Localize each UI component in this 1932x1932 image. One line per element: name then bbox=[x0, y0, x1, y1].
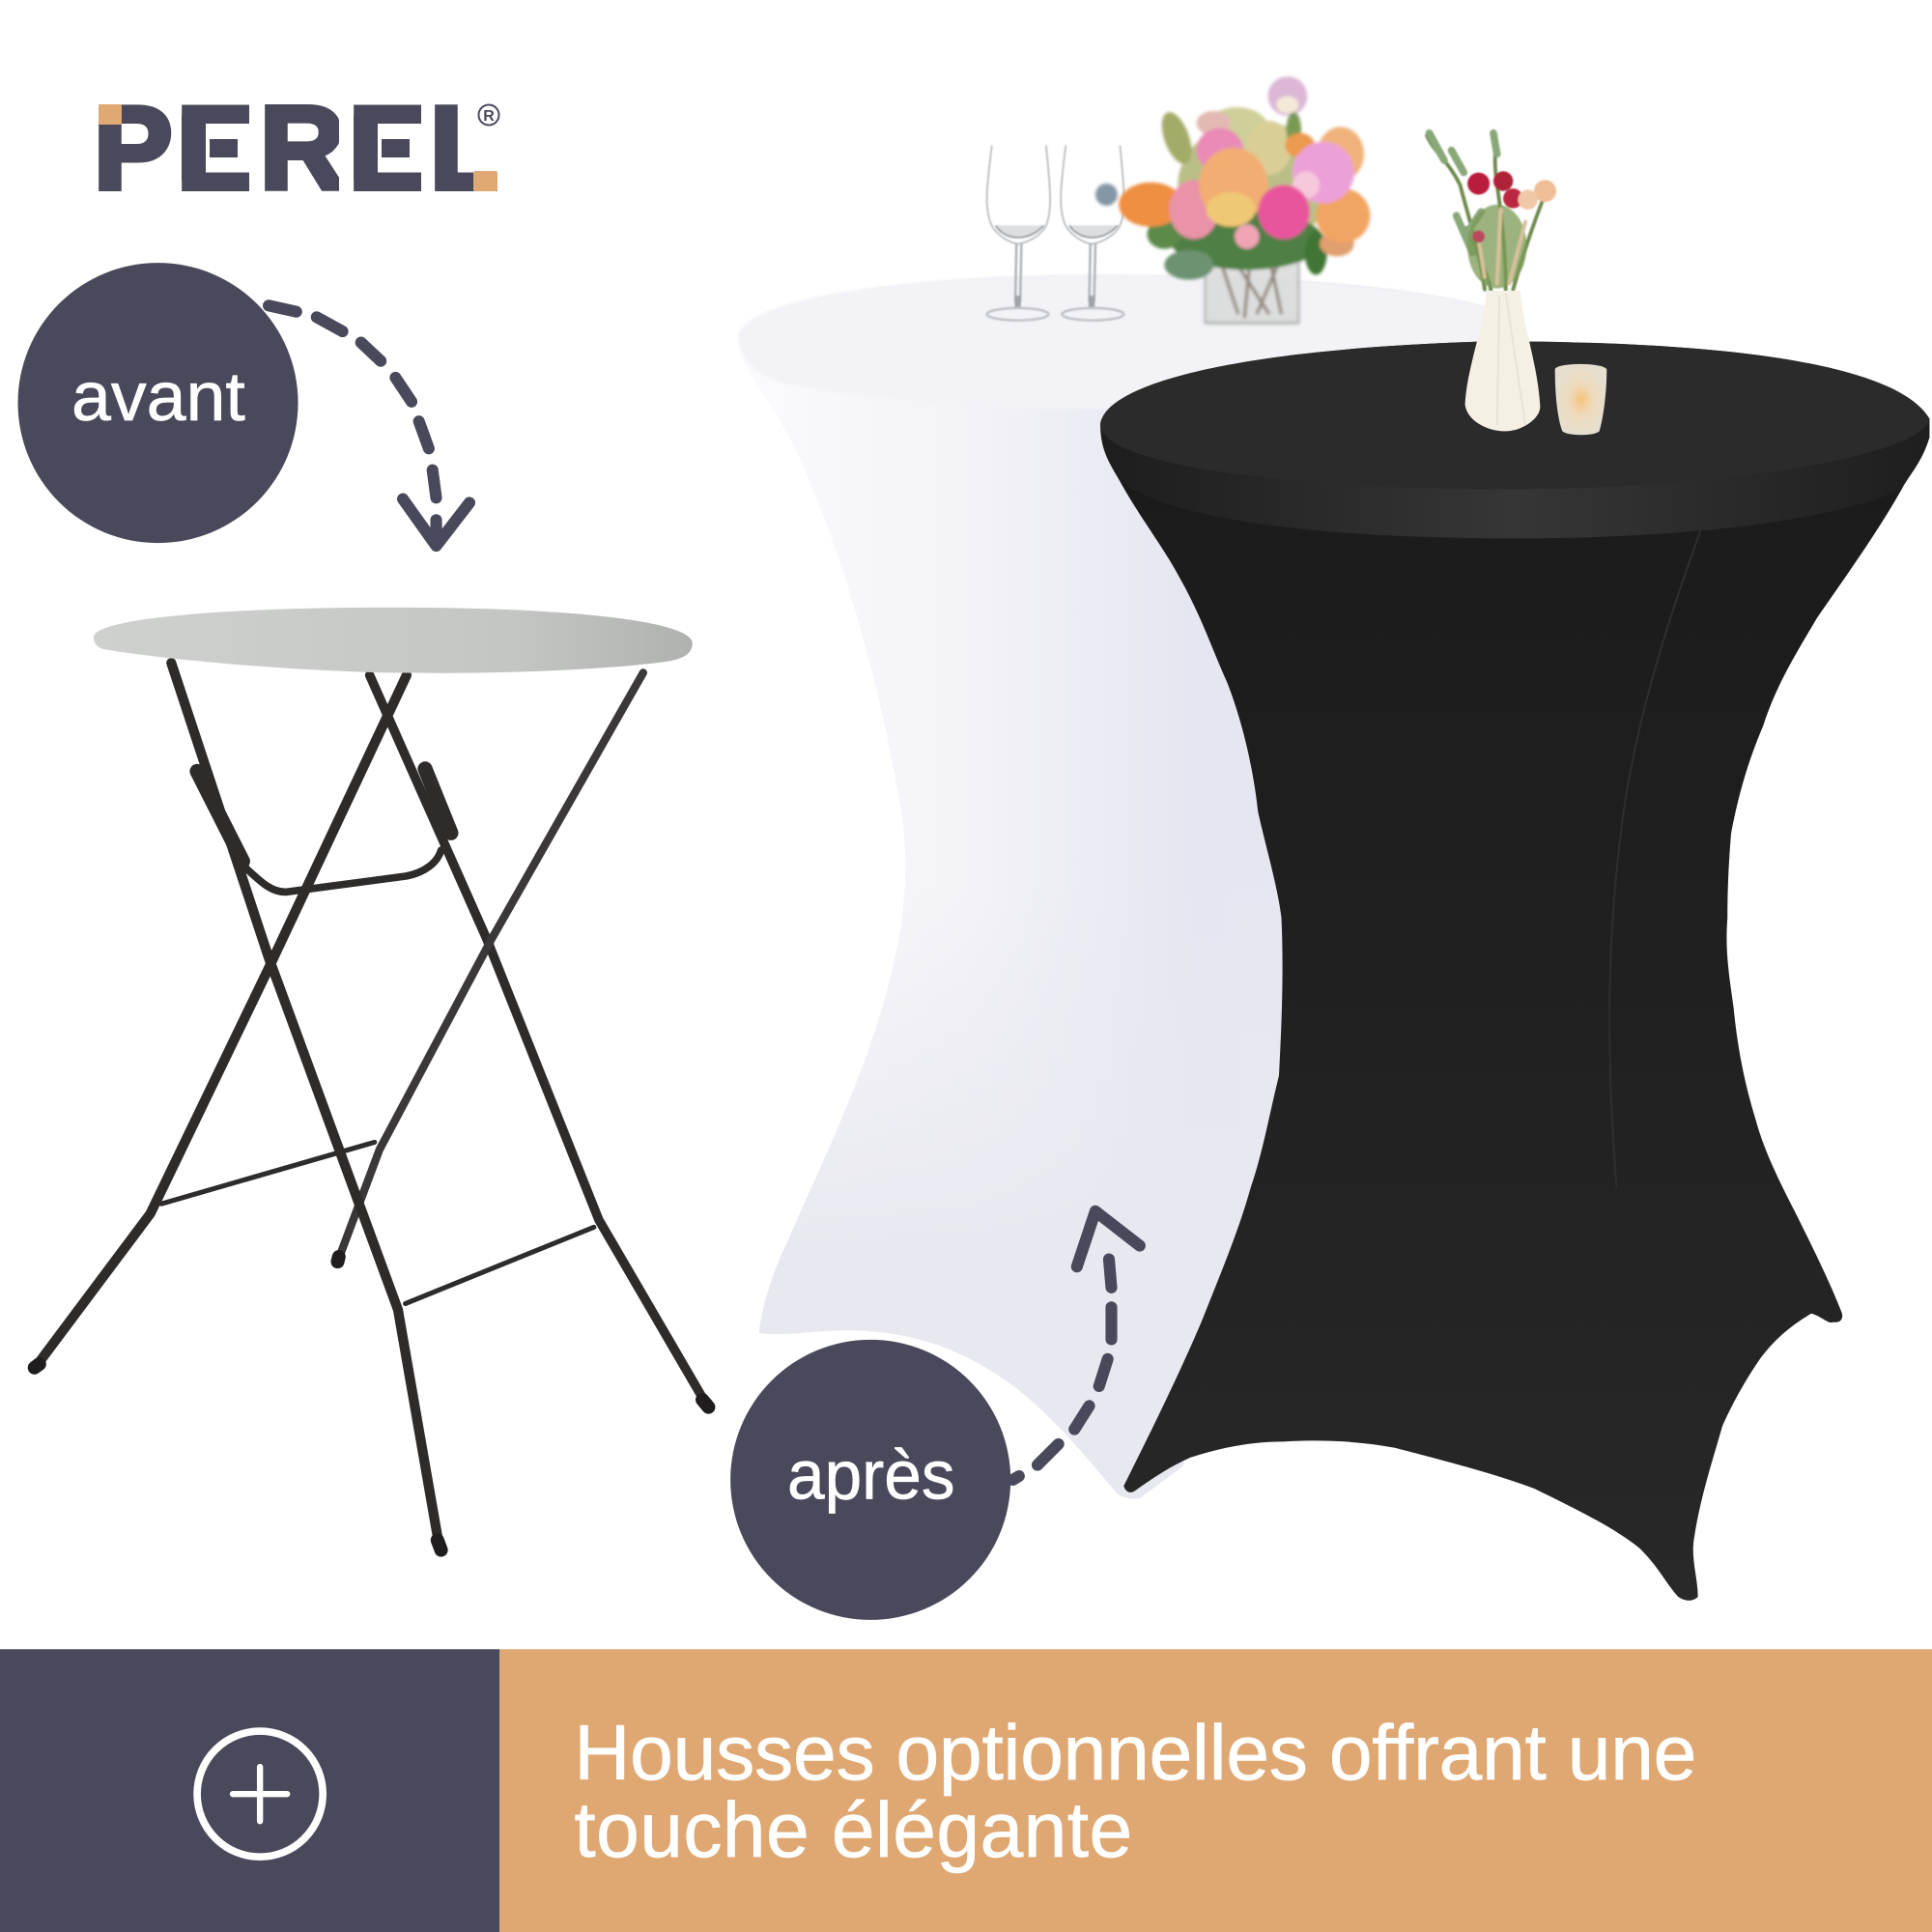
white covered table bbox=[738, 274, 1491, 1498]
footer band right: orange panel bbox=[499, 1649, 1932, 1932]
bouquet in glass vase bbox=[1095, 76, 1370, 326]
black covered table bbox=[1100, 341, 1929, 1601]
white vase with sprigs bbox=[1427, 133, 1556, 431]
arrow: après to covered table bbox=[1012, 1211, 1140, 1480]
logo: PEREL: PEREL bbox=[94, 82, 502, 213]
caption bbox=[574, 1710, 1696, 1874]
logo: PEREL: R bbox=[483, 108, 495, 125]
caption: touche élégante bbox=[574, 1787, 1132, 1874]
badge: avant: avant bbox=[71, 358, 245, 436]
badge: après: après bbox=[787, 1437, 955, 1515]
badge: avant bbox=[17, 263, 298, 543]
badge: après bbox=[730, 1340, 1010, 1620]
wine glasses bbox=[987, 146, 1124, 321]
footer band left: navy panel bbox=[0, 1649, 499, 1932]
caption: Housses optionnelles offrant une bbox=[574, 1710, 1696, 1797]
icon: plus in circle bbox=[197, 1731, 323, 1857]
arrow: avant to table bbox=[269, 305, 469, 546]
folding table bbox=[35, 608, 708, 1550]
candle bbox=[1555, 364, 1606, 435]
